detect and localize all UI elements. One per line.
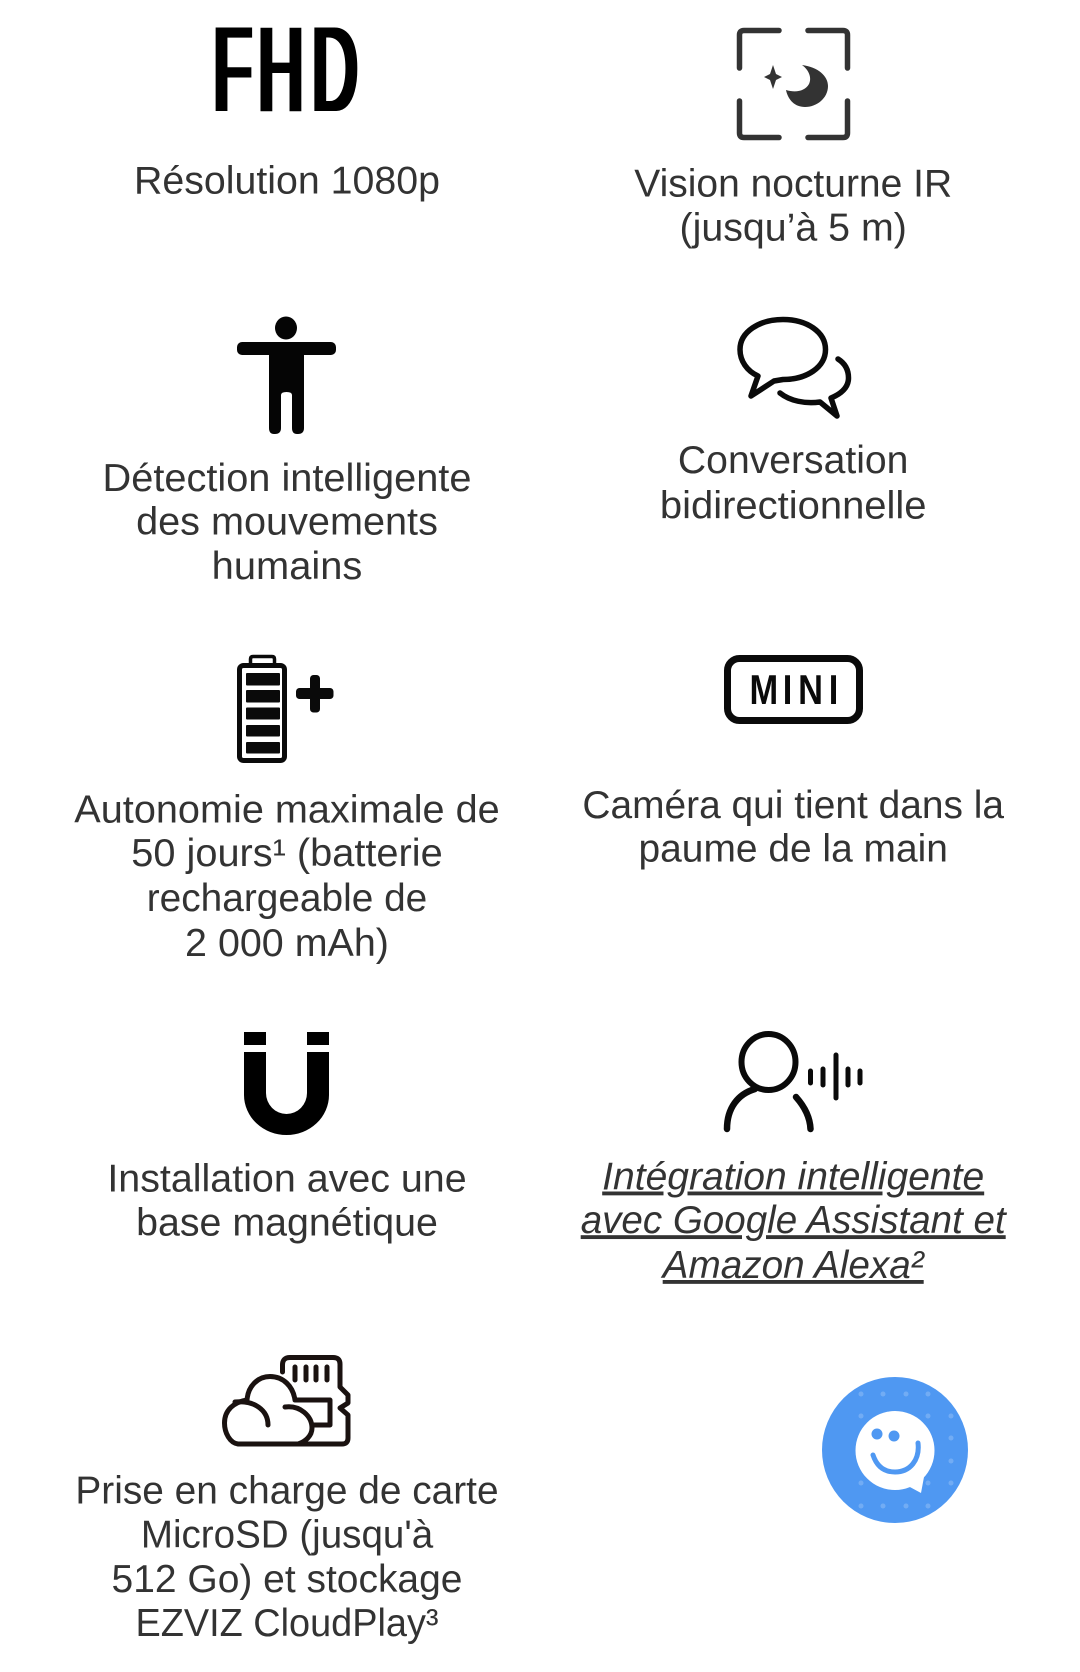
label: mini camera: Caméra qui tient dans la xyxy=(582,784,1005,827)
icon: magnet xyxy=(244,1032,329,1135)
feature: human detection xyxy=(103,316,471,588)
label: battery: 2 000 mAh) xyxy=(185,922,389,965)
icon: person with voice waves xyxy=(727,1034,860,1129)
label: human detection: humains xyxy=(212,545,362,588)
label: mini camera: paume de la main xyxy=(638,828,948,871)
label: magnetic base xyxy=(107,1158,467,1244)
label: battery: Autonomie maximale de xyxy=(74,789,500,832)
label: storage: 512 Go) et stockage xyxy=(112,1558,462,1601)
feature: storage xyxy=(75,1358,499,1645)
icon: chat button xyxy=(822,1377,968,1523)
label: two-way talk xyxy=(660,439,927,528)
label: voice assistant link xyxy=(581,1156,1008,1287)
icon: human figure xyxy=(237,316,336,434)
icon: cloud and microSD card xyxy=(224,1358,348,1444)
label: night vision: Vision nocturne IR xyxy=(634,162,952,206)
label: storage: Prise en charge de carte xyxy=(75,1470,499,1513)
label: voice assistant link: avec Google Assistant et xyxy=(581,1199,1008,1242)
icon: night vision frame with moon xyxy=(740,30,848,138)
label: human detection: Détection intelligente xyxy=(103,457,471,500)
label: human detection xyxy=(103,457,471,588)
icon: FHD: FHD xyxy=(213,3,357,137)
label: storage: MicroSD (jusqu'à xyxy=(141,1513,434,1556)
label: mini camera xyxy=(582,784,1005,871)
label: two-way talk: bidirectionnelle xyxy=(660,485,927,528)
label: voice assistant link: Amazon Alexa² xyxy=(661,1244,925,1287)
feature: mini camera xyxy=(582,658,1005,871)
label: human detection: des mouvements xyxy=(136,501,438,544)
label: storage: EZVIZ CloudPlay³ xyxy=(136,1602,439,1645)
label: storage xyxy=(75,1470,499,1645)
icon: battery plus xyxy=(240,656,334,760)
icon: MINI badge: MINI xyxy=(749,667,838,714)
label: magnetic base: Installation avec une xyxy=(107,1158,467,1201)
label: night vision: (jusqu’à 5 m) xyxy=(680,206,907,249)
feature: magnetic base xyxy=(107,1032,467,1244)
icon: speech bubbles xyxy=(740,320,848,416)
feature: battery xyxy=(74,656,500,965)
label: night vision xyxy=(634,162,952,249)
feature: voice assistant xyxy=(581,1034,1008,1287)
label: voice assistant link: Intégration intelligente xyxy=(602,1156,984,1198)
feature: FHD resolution xyxy=(134,3,440,203)
label: battery: 50 jours¹ (batterie xyxy=(131,832,443,875)
label: two-way talk: Conversation xyxy=(678,439,908,482)
label: resolution: Résolution 1080p xyxy=(134,160,440,202)
label: battery xyxy=(74,789,500,965)
icon: MINI badge xyxy=(728,658,860,720)
label: battery: rechargeable de xyxy=(147,877,427,920)
label: magnetic base: base magnétique xyxy=(136,1201,438,1244)
feature: two-way talk xyxy=(660,320,927,528)
feature: night vision xyxy=(634,30,952,249)
